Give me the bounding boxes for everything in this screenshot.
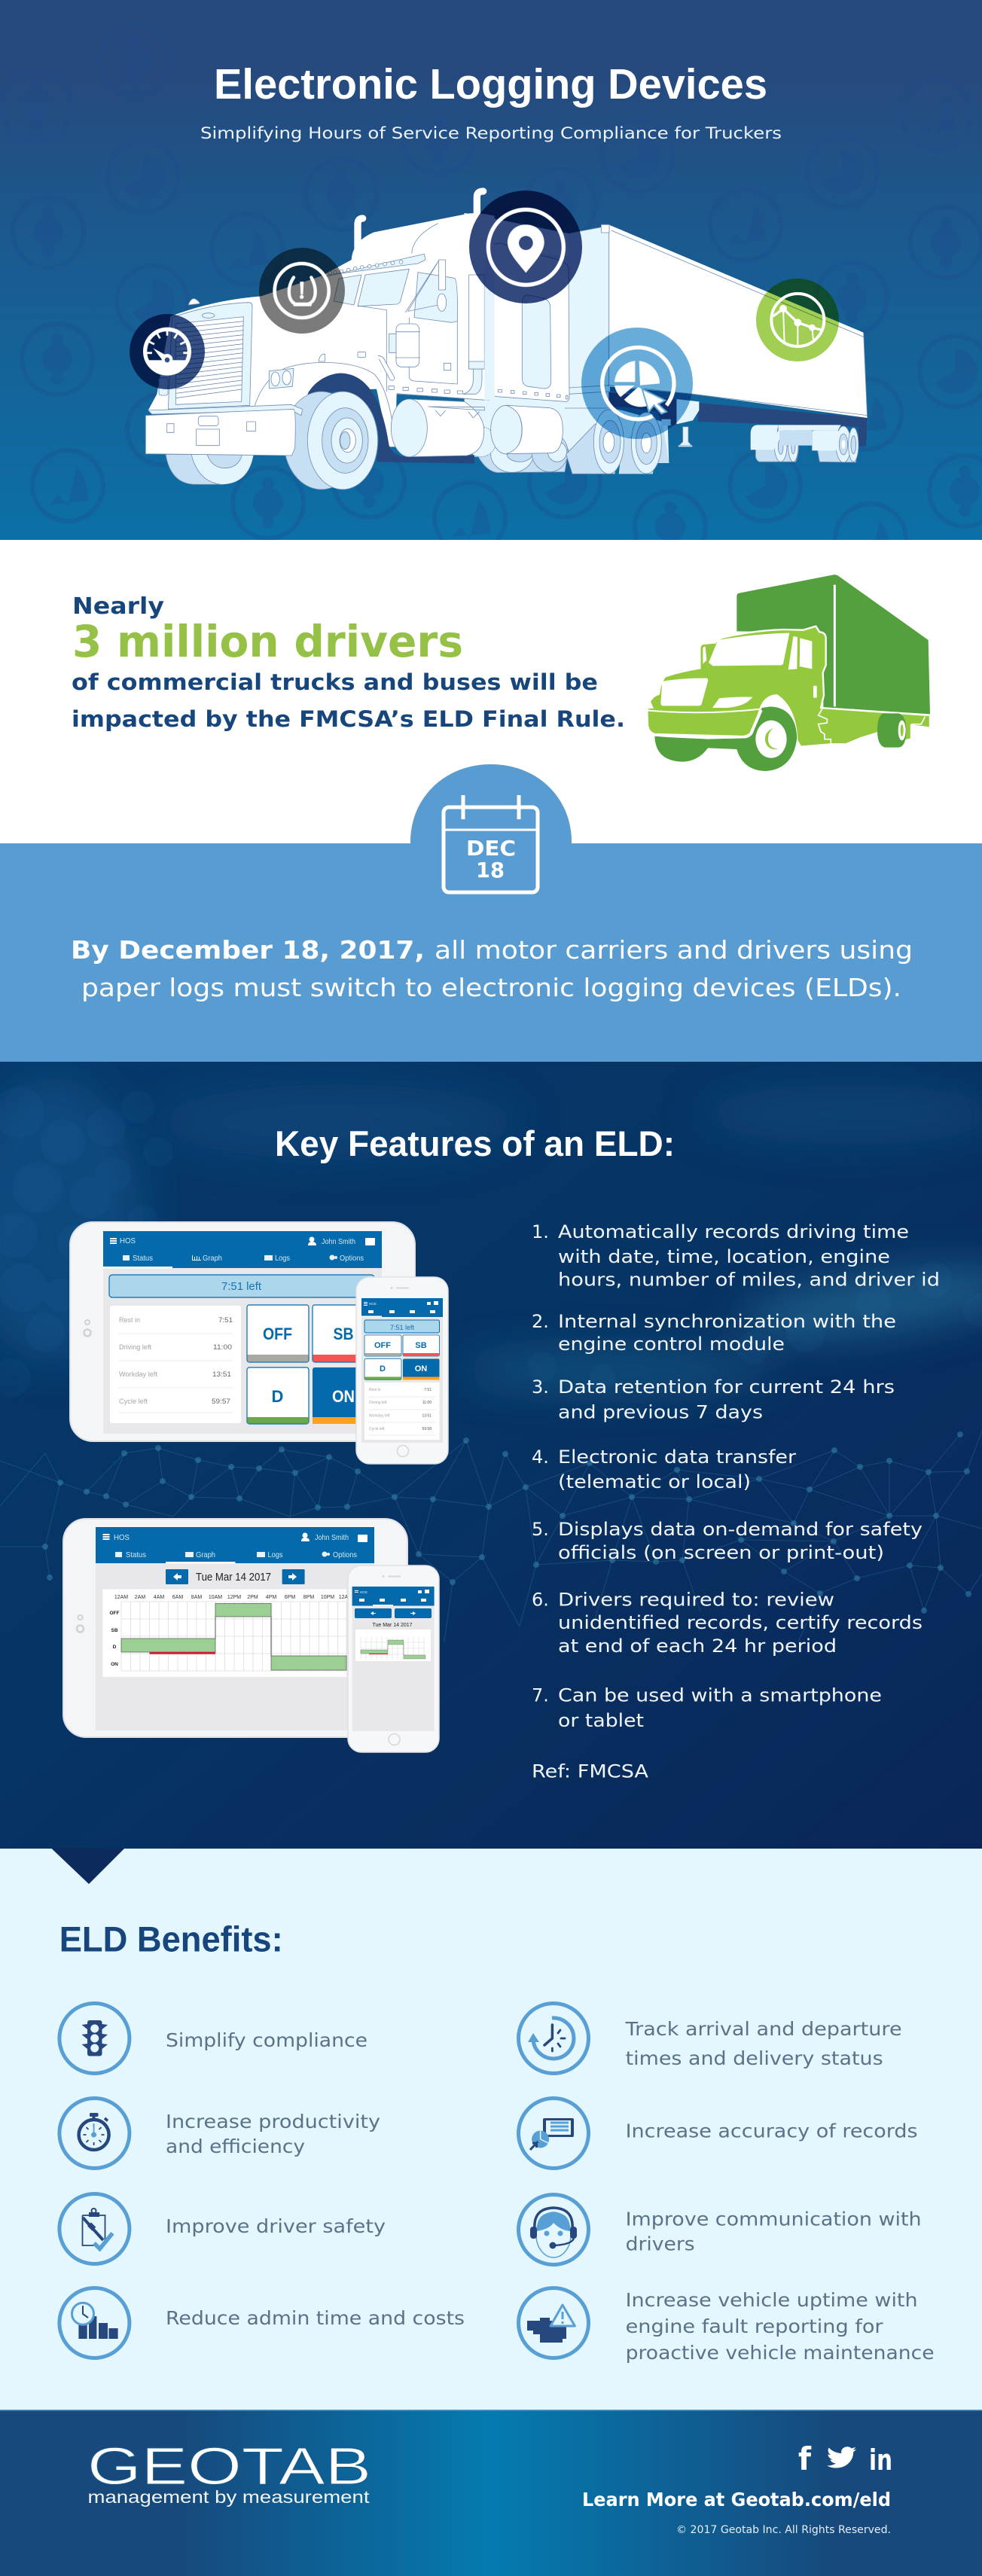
text: nearly: Nearly	[72, 593, 164, 620]
tablet: graph screen: ON	[111, 1662, 118, 1667]
tablet: status screen: HOS	[120, 1237, 136, 1245]
tablet: status screen: Status	[133, 1254, 153, 1263]
tablet: graph screen: Logs	[268, 1551, 283, 1559]
icon: calendar tab: 18	[476, 858, 505, 883]
illustration: semi truck	[145, 191, 868, 489]
reference note: Ref: FMCSA	[532, 1761, 649, 1782]
tablet: status screen: ON	[332, 1387, 355, 1406]
phone: status screen: Workday left	[369, 1414, 390, 1419]
text: deadline line 1: all motor carriers and drivers using	[435, 935, 913, 965]
panel: footer	[0, 2410, 982, 2576]
tablet: graph screen: D	[113, 1645, 117, 1650]
panel: compliance deadline	[0, 764, 982, 1062]
title: Electronic Logging Devices	[214, 60, 767, 108]
phone: graph screen: Tue Mar 14 2017	[372, 1623, 413, 1628]
tablet: status screen: Logs	[275, 1254, 290, 1263]
panel: hero header	[0, 0, 982, 575]
text: impact line 1: of commercial trucks and buses will be	[72, 669, 598, 695]
arrow: section notch	[52, 1849, 124, 1884]
feature 6: 6.	[532, 1589, 549, 1610]
benefit: vehicle uptime	[518, 2288, 935, 2364]
benefit: accuracy: Increase accuracy of records	[626, 2120, 918, 2142]
tablet: graph screen: 12AM	[114, 1595, 128, 1600]
feature 2: 2.	[532, 1311, 549, 1332]
text: impact line 2: impacted by the FMCSA’s ELD Final Rule.	[72, 706, 625, 732]
tablet: status screen: Workday left	[119, 1370, 157, 1379]
tablet: status screen: 59:57	[212, 1398, 230, 1406]
benefit: vehicle uptime: proactive vehicle maintenance	[626, 2342, 935, 2364]
phone: status screen: ON	[415, 1364, 427, 1373]
logo: Geotab: GEOTAB	[87, 2437, 371, 2495]
tablet: graph screen: Graph	[196, 1551, 215, 1559]
feature 1: with date, time, location, engine	[558, 1246, 890, 1267]
tablet: graph screen: OFF	[110, 1611, 120, 1616]
benefit: productivity: and efficiency	[166, 2135, 305, 2157]
benefit: vehicle uptime: Increase vehicle uptime with	[626, 2289, 918, 2311]
background network nodes	[42, 1431, 971, 1614]
tablet: status screen: 7:51 left	[221, 1280, 262, 1293]
tablet: graph screen: 10AM	[209, 1595, 222, 1600]
tablet: status screen: Rest in	[119, 1316, 140, 1325]
tablet: graph screen: 4AM	[154, 1595, 164, 1600]
phone: status screen: 11:00	[422, 1401, 432, 1405]
feature 6: unidentified records, certify records	[558, 1612, 923, 1633]
feature 3: and previous 7 days	[558, 1402, 763, 1423]
feature 1: hours, number of miles, and driver id	[558, 1270, 940, 1291]
tablet: status screen: Options	[340, 1254, 364, 1263]
tablet: graph screen: Options	[333, 1551, 357, 1559]
text: deadline bold: By December 18, 2017,	[71, 935, 425, 965]
phone: status screen	[356, 1277, 448, 1464]
feature 1	[532, 1221, 940, 1291]
tablet: graph screen: John Smith	[315, 1534, 349, 1542]
feature 3	[532, 1376, 895, 1423]
benefit: communication	[518, 2194, 922, 2265]
logo: Geotab: management by measurement	[87, 2487, 370, 2507]
tablet: graph screen: 2AM	[135, 1595, 145, 1600]
icon: pie chart badge	[581, 328, 693, 439]
tablet: graph screen	[63, 1519, 407, 1737]
phone: status screen: Driving left	[369, 1401, 387, 1405]
benefit: driver safety: Improve driver safety	[166, 2215, 386, 2237]
tablet: status screen: Cycle left	[119, 1398, 148, 1406]
feature 3: Data retention for current 24 hrs	[558, 1376, 895, 1398]
benefit: track arrival: Track arrival and departure	[625, 2018, 902, 2040]
watermark icon pattern	[30, 379, 982, 540]
text: deadline line 2: paper logs must switch to electronic logging devices (ELDs).	[81, 973, 901, 1002]
icon: trend chart badge	[756, 279, 839, 361]
tablet: graph screen: 8AM	[191, 1595, 202, 1600]
tablet: graph screen: 6PM	[285, 1595, 295, 1600]
tablet: graph screen: 2PM	[247, 1595, 258, 1600]
text: learn more: Learn More at Geotab.com/eld	[582, 2489, 891, 2510]
tablet: graph screen: 4PM	[266, 1595, 276, 1600]
tablet: status screen: 11:00	[213, 1343, 232, 1352]
phone: graph screen: HOS	[360, 1590, 367, 1594]
feature 6: at end of each 24 hr period	[558, 1636, 837, 1657]
phone: status screen: HOS	[369, 1302, 377, 1306]
tablet: graph screen: 6AM	[172, 1595, 183, 1600]
tablet: graph screen: Status	[126, 1551, 146, 1559]
tablet: graph screen: 10PM	[321, 1595, 334, 1600]
tablet: status screen: D	[272, 1387, 283, 1406]
feature 2: Internal synchronization with the	[558, 1311, 896, 1332]
icons: social media: f	[798, 2440, 812, 2477]
tablet: status screen: 13:51	[212, 1370, 231, 1379]
feature 5: 5.	[532, 1519, 549, 1540]
stat: 3 million drivers: 3 million drivers	[72, 616, 463, 667]
tablet: status screen: OFF	[263, 1325, 292, 1343]
tablet: graph screen: 12A	[339, 1595, 349, 1600]
benefit: admin time and costs	[59, 2288, 465, 2358]
feature 7: 7.	[532, 1685, 549, 1706]
icon: calendar tab	[410, 764, 572, 892]
tablet: graph screen: Tue Mar 14 2017	[196, 1571, 271, 1584]
icons: social media: in	[869, 2443, 892, 2477]
icon: speedometer badge	[130, 314, 205, 389]
tablet: status screen	[70, 1222, 415, 1441]
feature 3: 3.	[532, 1376, 549, 1398]
feature 6: Drivers required to: review	[558, 1589, 834, 1610]
background bokeh	[0, 1087, 982, 1398]
feature 4: 4.	[532, 1447, 549, 1468]
phone: status screen: SB	[415, 1341, 427, 1350]
benefit: admin time and costs: Reduce admin time and costs	[166, 2307, 465, 2329]
phone: status screen: 13:51	[422, 1414, 432, 1419]
heading: key features: Key Features of an ELD:	[275, 1123, 675, 1163]
feature 5	[532, 1519, 923, 1563]
benefit: vehicle uptime: engine fault reporting for	[626, 2315, 883, 2337]
feature 6	[532, 1589, 923, 1657]
tablet: status screen: John Smith	[322, 1238, 355, 1246]
tablet: status screen: 7:51	[218, 1316, 233, 1325]
heading: ELD benefits: ELD Benefits:	[59, 1919, 283, 1959]
feature 7	[532, 1685, 882, 1731]
phone: status screen: OFF	[374, 1341, 391, 1350]
icon: location pin badge	[469, 191, 582, 303]
phone: status screen: 7:51	[424, 1388, 432, 1392]
benefit: communication: drivers	[626, 2233, 695, 2254]
feature 5: Displays data on-demand for safety	[558, 1519, 923, 1540]
panel: 3 million drivers	[0, 540, 982, 843]
benefit: driver safety	[59, 2194, 386, 2264]
feature 7: Can be used with a smartphone	[558, 1685, 882, 1706]
panel: ELD benefits	[0, 1849, 982, 2410]
feature 4: (telematic or local)	[558, 1471, 751, 1492]
list: key features	[532, 1221, 940, 1782]
benefit: communication: Improve communication with	[626, 2208, 922, 2230]
phone: status screen: Rest in	[369, 1388, 381, 1392]
tablet: graph screen: SB	[111, 1628, 118, 1633]
trailer and sleeper	[465, 213, 868, 474]
tractor cab	[145, 191, 495, 489]
background network lines	[0, 1431, 982, 1642]
panel: key features	[0, 1062, 982, 1849]
text: copyright: © 2017 Geotab Inc. All Rights Reserved.	[676, 2524, 891, 2536]
feature 1: 1.	[532, 1221, 549, 1242]
tablet: status screen: Driving left	[119, 1343, 151, 1352]
benefit: productivity: Increase productivity	[166, 2111, 380, 2132]
benefit: track arrival	[518, 2003, 902, 2074]
tablet: status screen: SB	[333, 1325, 354, 1343]
feature 7: or tablet	[558, 1710, 644, 1731]
benefit: accuracy	[518, 2098, 918, 2169]
benefit: track arrival: times and delivery status	[626, 2047, 883, 2069]
logo: Geotab	[87, 2437, 371, 2507]
feature 5: officials (on screen or print-out)	[558, 1542, 884, 1563]
benefit: simplify compliance	[59, 2003, 367, 2074]
feature 4: Electronic data transfer	[558, 1447, 796, 1468]
feature 4	[532, 1449, 797, 1490]
tablet: graph screen: HOS	[114, 1534, 130, 1542]
phone: status screen: Cycle left	[369, 1427, 385, 1431]
tablet: graph screen: 8PM	[303, 1595, 314, 1600]
phone: status screen: 59:58	[422, 1427, 432, 1431]
tablet: graph screen: 12PM	[227, 1595, 241, 1600]
phone: graph screen	[348, 1565, 439, 1752]
tablet: status screen: Graph	[203, 1254, 222, 1263]
icon: calendar tab: DEC	[466, 836, 516, 861]
phone: status screen: 7:51 left	[390, 1324, 415, 1331]
benefit: productivity	[59, 2098, 380, 2169]
phone: status screen: D	[380, 1364, 386, 1373]
icon: green box truck	[647, 575, 930, 771]
background clouds	[0, 1077, 982, 1390]
feature 2	[532, 1311, 896, 1355]
icon: tire pressure badge	[259, 248, 345, 334]
subtitle: Simplifying Hours of Service Reporting Compliance for Truckers	[200, 124, 782, 142]
benefit: simplify compliance: Simplify compliance	[166, 2029, 367, 2051]
feature 2: engine control module	[558, 1334, 785, 1355]
feature 1: Automatically records driving time	[558, 1221, 909, 1242]
icons: social media	[798, 2440, 892, 2477]
